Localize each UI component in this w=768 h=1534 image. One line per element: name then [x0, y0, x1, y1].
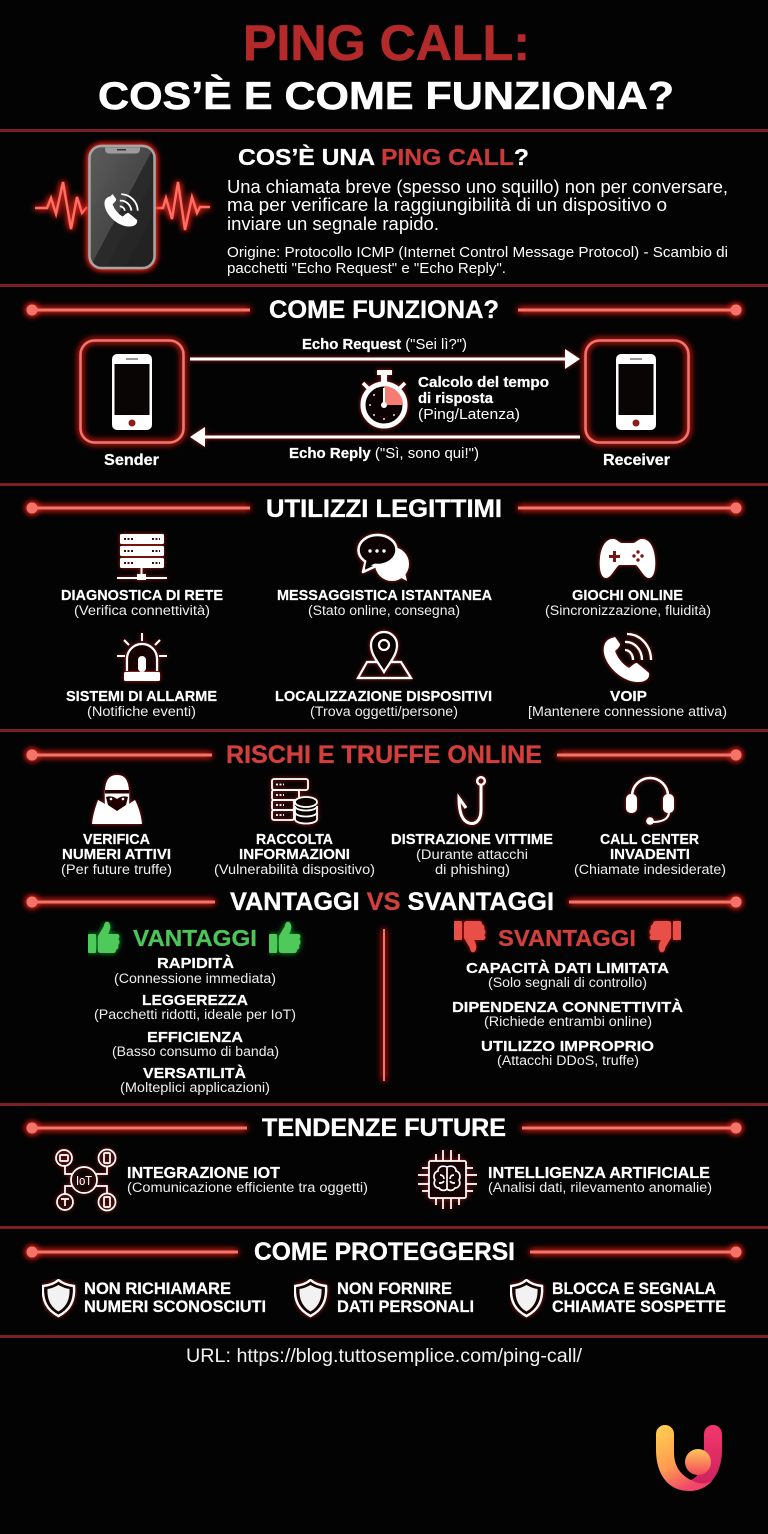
panel: tendenze future	[26, 1114, 742, 1210]
heading: vantaggi: VANTAGGI	[133, 925, 257, 951]
sender device	[80, 340, 184, 469]
icon: ai chip	[418, 1150, 477, 1209]
icon: shield 2	[295, 1280, 326, 1316]
panel: cos'è una ping call	[35, 143, 728, 277]
label: distrazione vittime: (Durante attacchi	[416, 847, 528, 862]
label: diagnostica di rete	[61, 587, 223, 618]
heading: tendenze future	[26, 1114, 742, 1142]
text block: definition	[227, 177, 728, 234]
label: diagnostica di rete: DIAGNOSTICA DI RETE	[61, 587, 223, 604]
label: raccolta informazioni: INFORMAZIONI	[239, 846, 350, 863]
heading: come funziona	[26, 296, 742, 324]
item: dipendenza connettività	[452, 999, 683, 1029]
item: versatilità: VERSATILITÀ	[143, 1065, 246, 1082]
text block: origin: pacchetti "Echo Request" e "Echo Reply".	[227, 260, 506, 277]
title: PING CALL:	[243, 15, 530, 71]
item: versatilità: (Molteplici applicazioni)	[120, 1080, 270, 1095]
heading: come funziona: COME FUNZIONA?	[269, 296, 499, 324]
item: leggerezza: (Pacchetti ridotti, ideale per IoT)	[94, 1007, 296, 1022]
title	[98, 15, 674, 118]
label: voip	[528, 688, 727, 719]
label: raccolta informazioni	[214, 831, 375, 877]
label: verifica numeri attivi: (Per future truffe)	[61, 862, 172, 877]
text block: origin: Origine: Protocollo ICMP (Internet Control Message Protocol) - Scambio di	[227, 244, 728, 261]
panel: come proteggersi	[26, 1238, 742, 1316]
icon: chat bubbles	[358, 535, 409, 581]
label: giochi online: GIOCHI ONLINE	[572, 587, 683, 604]
text: integrazione iot: INTEGRAZIONE IOT	[127, 1165, 280, 1182]
label: voip: [Mantenere connessione attiva)	[528, 704, 727, 719]
label: call center invadenti: INVADENTI	[610, 846, 690, 863]
text: non fornire	[337, 1279, 474, 1316]
item: dipendenza connettività: DIPENDENZA CONNETTIVITÀ	[452, 999, 683, 1016]
icon: shield 3	[511, 1280, 542, 1316]
panel: vantaggi vs svantaggi	[26, 888, 742, 1095]
receiver device	[586, 340, 688, 469]
label: raccolta informazioni: RACCOLTA	[256, 831, 333, 848]
icon: game controller	[600, 539, 655, 578]
icon: thumbs up left	[88, 922, 120, 953]
icon: voip phone	[604, 634, 651, 682]
label: call center invadenti	[574, 831, 726, 877]
heading: cos'è una ping call: COS’È UNA PING CALL ?	[238, 143, 529, 170]
label: sistemi di allarme: (Notifiche eventi)	[87, 704, 196, 719]
text: non fornire: NON FORNIRE	[337, 1279, 452, 1298]
icon: map pin	[358, 632, 411, 678]
text: response time: Calcolo del tempo	[418, 375, 549, 391]
text: response time: (Ping/Latenza)	[418, 407, 520, 423]
text: blocca e segnala: CHIAMATE SOSPETTE	[552, 1297, 726, 1316]
label: localizzazione dispositivi: (Trova oggetti/persone)	[310, 704, 458, 719]
label: verifica numeri attivi: NUMERI ATTIVI	[62, 846, 171, 863]
text: response time: di risposta	[418, 391, 494, 407]
icon: hooded scammer	[92, 775, 142, 824]
icon: thumbs down left	[454, 921, 486, 952]
label: call center invadenti: CALL CENTER	[600, 831, 699, 848]
item: rapidità	[114, 955, 276, 986]
item: efficienza: (Basso consumo di banda)	[112, 1044, 279, 1059]
item: versatilità	[120, 1065, 270, 1095]
label: sistemi di allarme	[66, 688, 217, 719]
icon: thumbs up right	[269, 922, 300, 953]
heading: come proteggersi: COME PROTEGGERSI	[254, 1238, 515, 1266]
item: leggerezza: LEGGEREZZA	[142, 992, 248, 1009]
heading: rischi e truffe online: RISCHI E TRUFFE ONLINE	[226, 741, 542, 769]
icon: stopwatch	[363, 370, 405, 426]
text: blocca e segnala	[552, 1279, 726, 1316]
label: giochi online	[545, 587, 711, 618]
icon: iot network: IoT	[76, 1173, 92, 1188]
text block: definition: inviare un segnale rapido.	[227, 214, 439, 234]
icon: thumbs down right	[650, 921, 681, 952]
icon: headset	[626, 778, 674, 825]
url: URL: https://blog.tuttosemplice.com/ping-call/	[186, 1346, 583, 1367]
label: distrazione vittime: di phishing)	[435, 862, 510, 877]
icon: phone with heartbeat	[35, 146, 210, 268]
heading: vantaggi vs svantaggi	[26, 888, 742, 916]
label: raccolta informazioni: (Vulnerabilità dispositivo)	[214, 862, 375, 877]
panel: come funziona	[26, 296, 742, 469]
heading: svantaggi: SVANTAGGI	[498, 925, 636, 951]
item: rapidità: RAPIDITÀ	[157, 955, 234, 972]
label: localizzazione dispositivi	[275, 688, 492, 719]
label: sistemi di allarme: SISTEMI DI ALLARME	[66, 688, 217, 705]
text: intelligenza artificiale	[488, 1165, 712, 1195]
arrow: echo request	[190, 337, 580, 369]
icon: data collection	[272, 779, 317, 824]
icon: fishing hook	[459, 777, 485, 823]
arrow: echo reply: Echo Reply ("Sì, sono qui!")	[289, 446, 479, 462]
text block: definition: ma per verificare la raggiungibilità di un dispositivo o	[227, 195, 667, 215]
text: intelligenza artificiale: INTELLIGENZA ARTIFICIALE	[488, 1165, 710, 1182]
item: capacità dati limitata: (Solo segnali di controllo)	[488, 975, 647, 990]
text: non richiamare	[84, 1279, 266, 1316]
icon: network server	[117, 534, 167, 580]
label: distrazione vittime: DISTRAZIONE VITTIME	[391, 831, 553, 848]
text: non richiamare: NON RICHIAMARE	[84, 1279, 231, 1298]
logo	[656, 1425, 722, 1491]
heading: vantaggi vs svantaggi: VANTAGGI VS SVANTAGGI	[230, 888, 554, 916]
item: leggerezza	[94, 992, 296, 1022]
heading: tendenze future: TENDENZE FUTURE	[262, 1114, 506, 1142]
heading: rischi e truffe online	[26, 741, 742, 769]
column: vantaggi	[88, 922, 300, 1095]
text: response time	[418, 375, 549, 423]
text block: origin	[227, 244, 728, 277]
text block: definition: Una chiamata breve (spesso uno squillo) non per conversare,	[227, 177, 728, 197]
column: svantaggi	[452, 921, 683, 1068]
label: distrazione vittime	[391, 831, 553, 877]
item: efficienza: EFFICIENZA	[147, 1029, 243, 1046]
item: rapidità: (Connessione immediata)	[114, 971, 276, 986]
item: capacità dati limitata: CAPACITÀ DATI LIMITATA	[466, 960, 669, 977]
text: non richiamare: NUMERI SCONOSCIUTI	[84, 1297, 266, 1316]
heading: utilizzi legittimi: UTILIZZI LEGITTIMI	[266, 495, 502, 523]
icon: shield 1	[43, 1280, 74, 1316]
item: dipendenza connettività: (Richiede entrambi online)	[484, 1014, 652, 1029]
item: utilizzo improprio: UTILIZZO IMPROPRIO	[481, 1038, 654, 1055]
text: intelligenza artificiale: (Analisi dati, rilevamento anomalie)	[488, 1180, 712, 1195]
item: utilizzo improprio: (Attacchi DDoS, truffe)	[497, 1053, 639, 1068]
text: integrazione iot	[127, 1165, 368, 1195]
item: efficienza	[112, 1029, 279, 1059]
item: capacità dati limitata	[466, 960, 669, 990]
divider: vertical	[383, 929, 385, 1081]
label: messaggistica istantanea: MESSAGGISTICA ISTANTANEA	[277, 587, 492, 604]
title: COS’È E COME FUNZIONA?	[98, 74, 674, 118]
icon: alarm beacon	[117, 633, 167, 681]
text: integrazione iot: (Comunicazione efficiente tra oggetti)	[127, 1180, 368, 1195]
label: messaggistica istantanea: (Stato online, consegna)	[308, 603, 460, 618]
label: verifica numeri attivi: VERIFICA	[83, 831, 150, 848]
label: voip: VOIP	[610, 688, 647, 705]
arrow: echo request: Echo Request ("Sei lì?")	[302, 337, 467, 353]
receiver device: Receiver	[603, 452, 670, 469]
text: blocca e segnala: BLOCCA E SEGNALA	[552, 1279, 716, 1298]
icon: iot network	[56, 1150, 116, 1210]
heading: come proteggersi	[26, 1238, 742, 1266]
sender device: Sender	[104, 452, 159, 469]
arrow: echo reply	[190, 427, 580, 462]
label: call center invadenti: (Chiamate indesiderate)	[574, 862, 726, 877]
item: utilizzo improprio	[481, 1038, 654, 1068]
panel: rischi e truffe online	[26, 741, 742, 877]
label: verifica numeri attivi	[61, 831, 172, 877]
label: diagnostica di rete: (Verifica connettività)	[74, 603, 210, 618]
label: localizzazione dispositivi: LOCALIZZAZIONE DISPOSITIVI	[275, 688, 492, 705]
label: messaggistica istantanea	[277, 587, 492, 618]
heading: utilizzi legittimi	[26, 495, 742, 523]
text: non fornire: DATI PERSONALI	[337, 1297, 474, 1316]
panel: utilizzi legittimi	[26, 495, 742, 719]
label: giochi online: (Sincronizzazione, fluidità)	[545, 603, 711, 618]
